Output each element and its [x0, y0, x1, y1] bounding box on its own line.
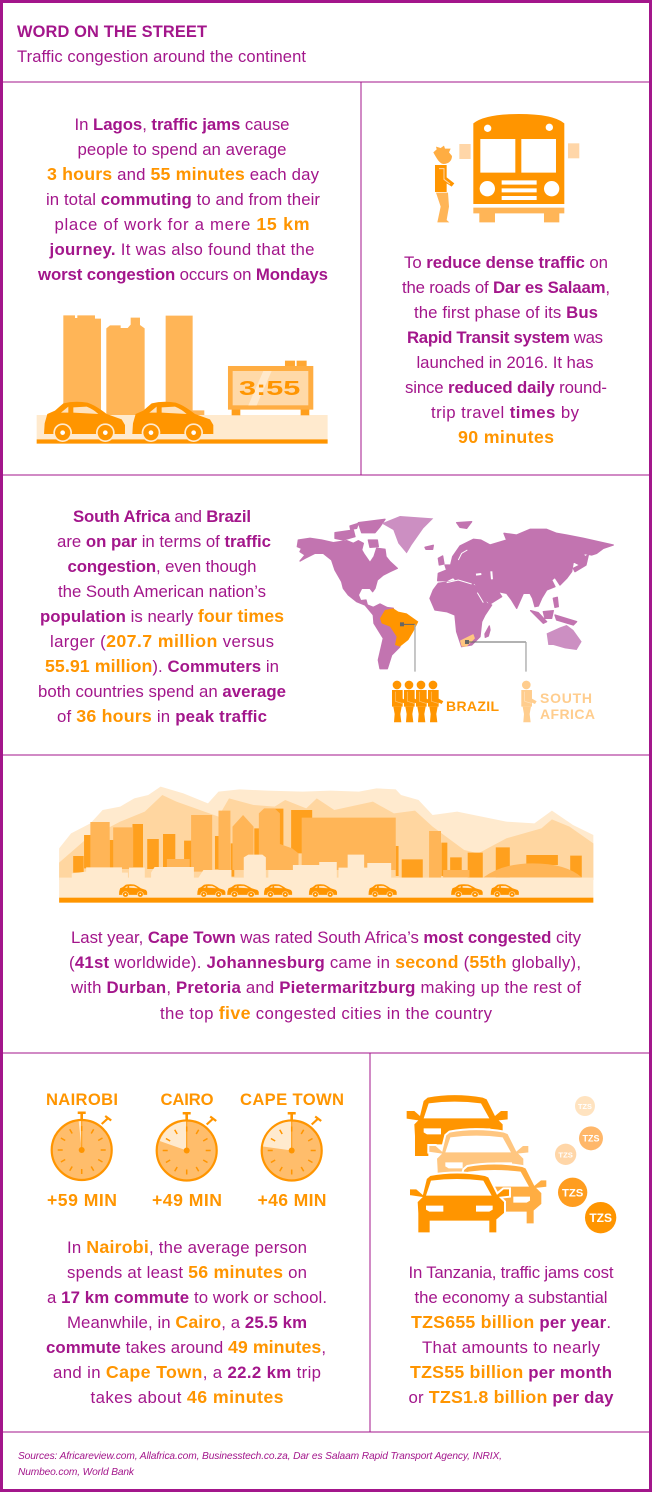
text block: Bus Rapid Transit: Rapid Transit system was: [407, 328, 603, 347]
text block: Cape Town ranking: [69, 928, 582, 1023]
text block: comparison: of 36 hours in peak traffic: [57, 706, 267, 726]
label: Brazil: BRAZIL: [446, 698, 499, 714]
text block: commute details: [46, 1237, 327, 1407]
stopwatch: Cairo: +49 MIN: [152, 1190, 222, 1210]
text block: comparison: are on par in terms of traffic: [57, 532, 271, 551]
illustration: cars and TZS coins: TZS: [562, 1187, 584, 1199]
text block: Bus Rapid Transit: 90 minutes: [458, 427, 554, 447]
text block: commute details: and in Cape Town, a 22.2 km trip: [53, 1362, 321, 1382]
stopwatch: Cape Town: CAPE TOWN: [240, 1090, 344, 1109]
stopwatch: Nairobi: NAIROBI: [46, 1090, 118, 1109]
text block: Bus Rapid Transit: the first phase of its Bus: [414, 303, 598, 322]
sources: Numbeo.com, World Bank: [18, 1467, 135, 1478]
icon: digital clock: 3:55: [239, 378, 300, 400]
stopwatch: Cairo: [152, 1090, 222, 1210]
sources: Sources: Africareview.com, Allafrica.com, Businesstech.co.za, Dar es Salaam Rapid Transport Agency, INRIX,: [18, 1451, 502, 1462]
text block: comparison: larger (207.7 million versus: [50, 631, 274, 651]
text block: Cape Town ranking: the top five congested cities in the country: [160, 1003, 493, 1023]
stopwatch: Cape Town: +46 MIN: [258, 1190, 326, 1210]
icon: Brazil commuters: [392, 681, 443, 722]
panel: Dar es Salaam bus: [402, 114, 610, 447]
text block: comparison: [38, 507, 286, 726]
text block: Lagos commuting: worst congestion occurs on Mondays: [37, 265, 328, 284]
text block: Bus Rapid Transit: [402, 253, 610, 447]
title: Traffic congestion around the continent: [17, 47, 306, 66]
text block: cost of jams: In Tanzania, traffic jams cost: [408, 1263, 614, 1282]
text block: Bus Rapid Transit: the roads of Dar es Salaam,: [402, 278, 610, 297]
stopwatch: Nairobi: +59 MIN: [47, 1190, 117, 1210]
text block: comparison: the South American nation’s: [58, 582, 266, 601]
text block: Lagos commuting: 3 hours and 55 minutes each day: [47, 164, 320, 184]
text block: Bus Rapid Transit: To reduce dense traffic on: [404, 253, 608, 272]
text block: commute details: takes about 46 minutes: [90, 1387, 284, 1407]
text block: cost of jams: TZS55 billion per month: [410, 1362, 612, 1382]
text block: Lagos commuting: journey. It was also found that the: [48, 240, 314, 259]
icon: cars: [119, 884, 519, 897]
illustration: cars and TZS coins: TZS: [589, 1211, 612, 1225]
text block: Lagos commuting: in total commuting to and from their: [46, 190, 320, 209]
illustration: cars and TZS coins: TZS: [558, 1150, 573, 1159]
text block: cost of jams: the economy a substantial: [414, 1288, 608, 1307]
text block: Lagos commuting: place of work for a mere 15 km: [54, 214, 310, 234]
panel: South Africa and Brazil: [38, 507, 613, 726]
text block: cost of jams: [408, 1263, 614, 1407]
panel: Tanzania cost: [407, 1095, 616, 1407]
illustration: cars and TZS coins: [407, 1095, 616, 1235]
icon: digital clock: [228, 361, 313, 415]
text block: cost of jams: TZS655 billion per year.: [411, 1312, 611, 1332]
text block: commute details: spends at least 56 minutes on: [67, 1262, 307, 1282]
text block: cost of jams: That amounts to nearly: [422, 1338, 601, 1357]
panel: Lagos: [37, 115, 328, 444]
sources: [18, 1451, 502, 1478]
label: South Africa: AFRICA: [540, 706, 595, 722]
label: South Africa: SOUTH: [540, 690, 592, 706]
text block: comparison: 55.91 million). Commuters in: [45, 656, 279, 676]
text block: commute details: a 17 km commute to work or school.: [47, 1288, 327, 1307]
icon: bus and person: [433, 114, 579, 222]
text block: comparison: congestion, even though: [68, 557, 256, 576]
panel: Cape Town: [59, 787, 593, 1023]
connector lines: [402, 624, 526, 672]
text block: Cape Town ranking: with Durban, Pretoria and Pietermaritzburg making up the rest of: [70, 978, 581, 997]
text block: Bus Rapid Transit: launched in 2016. It has: [416, 353, 594, 372]
text block: commute details: commute takes around 49 minutes,: [46, 1337, 326, 1357]
text block: Lagos commuting: [37, 115, 328, 284]
text block: commute details: In Nairobi, the average person: [67, 1237, 307, 1257]
illustration: city traffic and clock: [37, 315, 328, 444]
text block: comparison: population is nearly four times: [40, 606, 284, 626]
text block: commute details: Meanwhile, in Cairo, a 25.5 km: [67, 1312, 307, 1332]
text block: Cape Town ranking: Last year, Cape Town was rated South Africa’s most congested city: [71, 928, 582, 947]
icon: South Africa commuter: [521, 681, 537, 722]
text block: Lagos commuting: people to spend an average: [78, 140, 286, 159]
panel: commute times: [46, 1090, 344, 1407]
seas: [447, 550, 492, 603]
text block: comparison: both countries spend an average: [38, 682, 286, 701]
text block: Cape Town ranking: (41st worldwide). Johannesburg came in second (55th globally),: [69, 952, 581, 972]
illustration: Cape Town skyline: [59, 787, 593, 903]
text block: Lagos commuting: In Lagos, traffic jams cause: [74, 115, 290, 134]
chart: world map: [297, 516, 613, 722]
illustration: cars and TZS coins: TZS: [578, 1102, 592, 1111]
stopwatch: Nairobi: [46, 1090, 118, 1210]
text block: Bus Rapid Transit: trip travel times by: [431, 403, 580, 422]
text block: cost of jams: or TZS1.8 billion per day: [408, 1387, 614, 1407]
stopwatch: Cape Town: [240, 1090, 344, 1210]
stopwatch: Cairo: CAIRO: [160, 1090, 214, 1109]
title: WORD ON THE STREET: [17, 23, 207, 41]
title: [17, 23, 306, 66]
label: South Africa: [540, 690, 595, 722]
text block: Bus Rapid Transit: since reduced daily round-: [405, 378, 607, 397]
text block: comparison: South Africa and Brazil: [73, 507, 251, 526]
illustration: cars and TZS coins: TZS: [582, 1134, 599, 1144]
